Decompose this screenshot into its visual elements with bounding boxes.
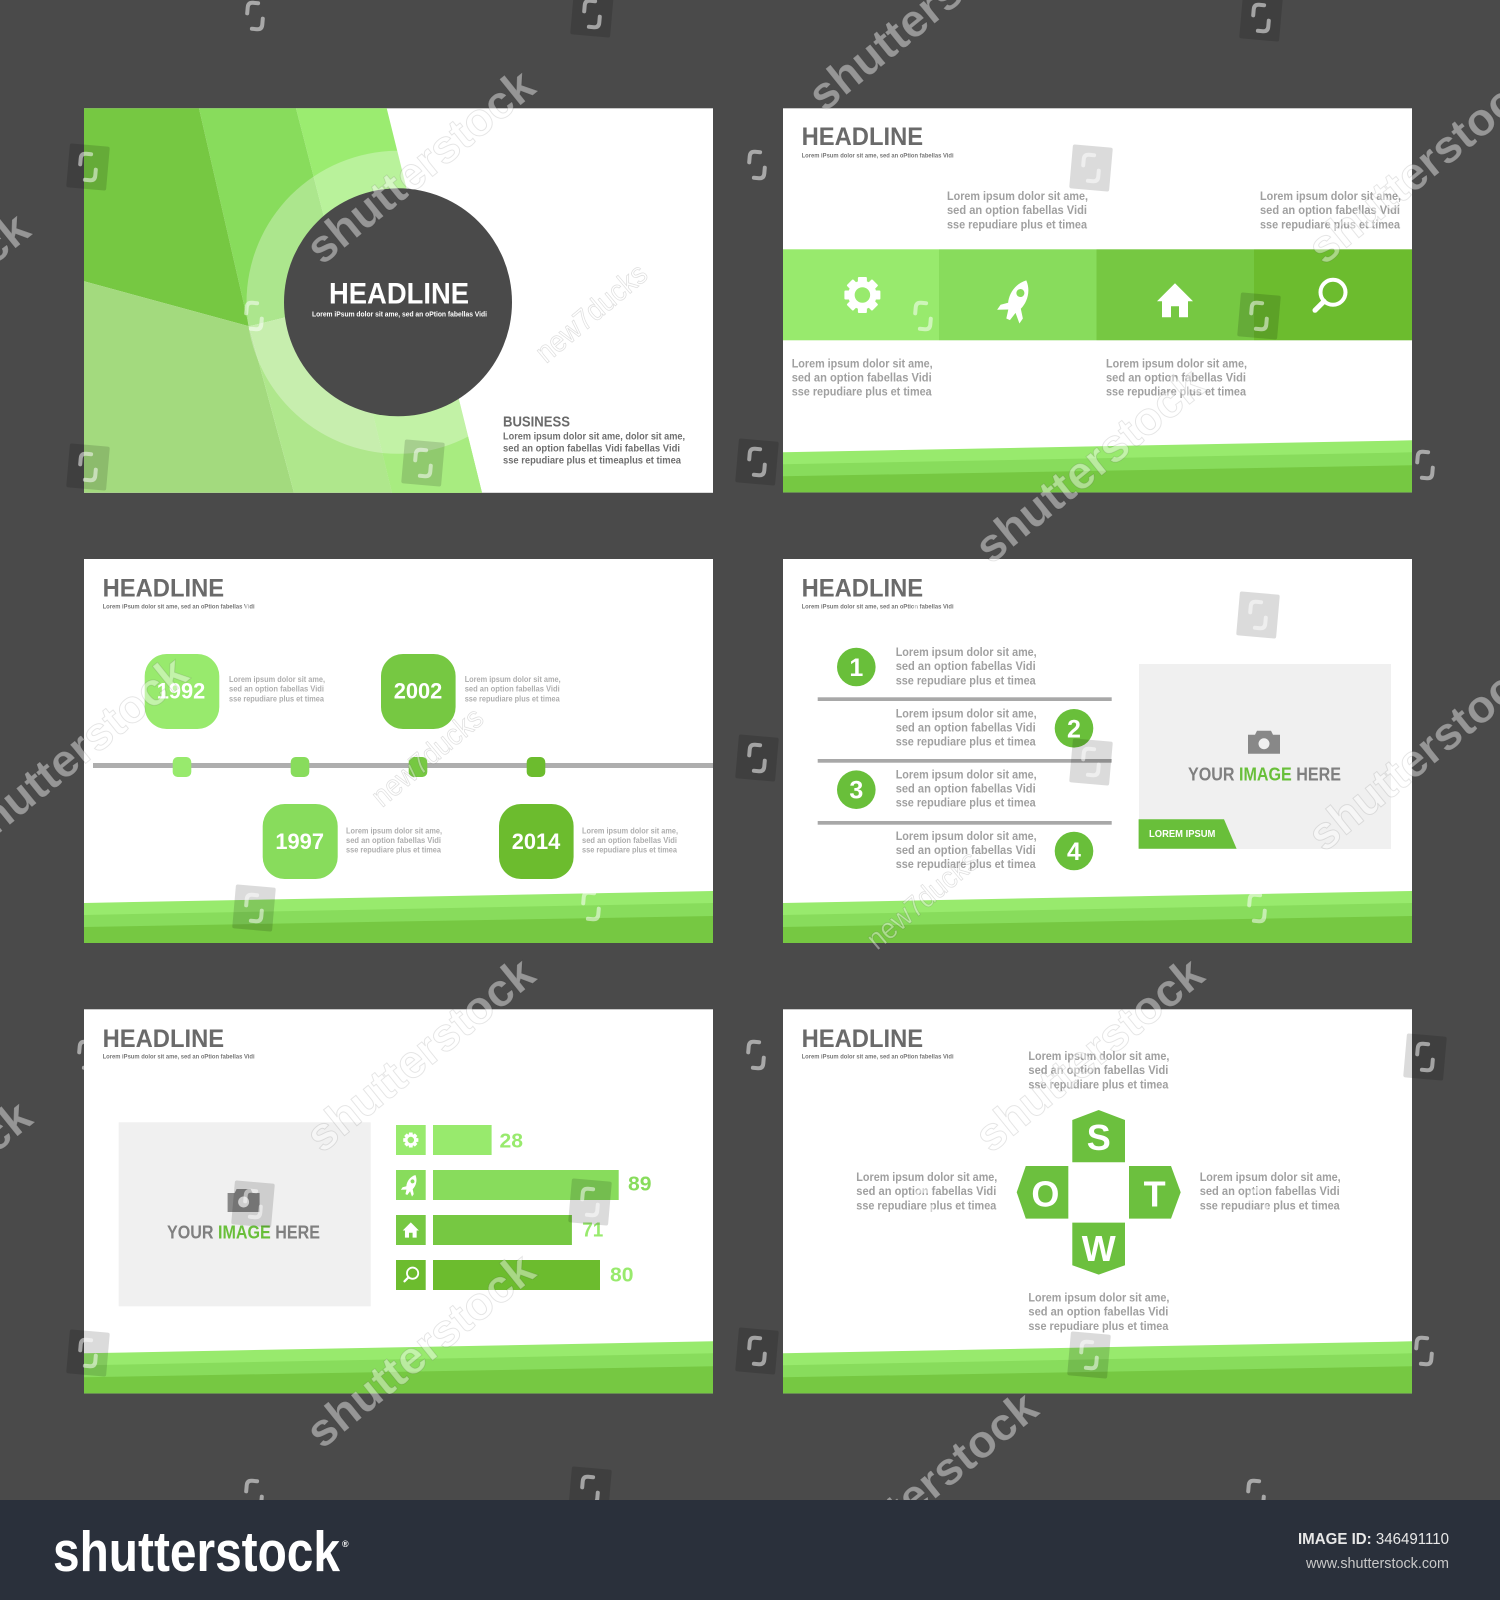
milestone 1997 bbox=[263, 804, 338, 879]
list item 1: sse repudiare plus et timea bbox=[896, 675, 1036, 687]
business text block: sse repudiare plus et timeaplus et timea bbox=[503, 454, 681, 466]
bar: rocket 89 bbox=[396, 1170, 652, 1200]
bar: gear 28: 28 bbox=[500, 1131, 523, 1153]
text block: bottom two bbox=[1106, 358, 1247, 398]
stock watermarks: shutterstock bbox=[965, 357, 1214, 573]
milestone 1997 text: sse repudiare plus et timea bbox=[346, 846, 442, 855]
list dividers bbox=[818, 697, 1112, 825]
text block: left: Lorem ipsum dolor sit ame, bbox=[856, 1172, 997, 1184]
text block: bottom two: sed an option fabellas Vidi bbox=[1106, 372, 1246, 384]
list item 1: 1 bbox=[849, 654, 863, 682]
icon: gear bbox=[844, 277, 880, 313]
business text block bbox=[503, 414, 685, 466]
list item 1: sed an option fabellas Vidi bbox=[896, 661, 1036, 673]
text block: bottom two: sse repudiare plus et timea bbox=[1106, 386, 1247, 398]
text block: top one bbox=[947, 191, 1088, 231]
image placeholder bbox=[1139, 664, 1391, 849]
heading: HEADLINE bbox=[103, 575, 224, 603]
milestone 1992 bbox=[145, 654, 219, 729]
text block: right: sse repudiare plus et timea bbox=[1200, 1200, 1340, 1212]
heading: HEADLINE bbox=[802, 575, 923, 603]
icon: home bbox=[1157, 283, 1193, 317]
tag: lorem ipsum bbox=[1139, 819, 1237, 849]
text block: top bbox=[1028, 1051, 1169, 1091]
milestone 2014 text: sed an option fabellas Vidi bbox=[582, 836, 677, 845]
stock watermarks: new7ducks bbox=[365, 701, 490, 813]
list item 2 bbox=[896, 708, 1093, 749]
heading: HEADLINE bbox=[802, 1025, 923, 1053]
list item 3 bbox=[837, 770, 1037, 810]
list item 2: 2 bbox=[1067, 715, 1081, 743]
placeholder caption: YOUR IMAGE HERE bbox=[167, 1223, 320, 1243]
milestone 2014 text: sse repudiare plus et timea bbox=[582, 846, 678, 855]
list item 4: sed an option fabellas Vidi bbox=[896, 845, 1036, 857]
text block: bottom one bbox=[792, 358, 933, 398]
stock watermarks: shutterstock bbox=[296, 1242, 545, 1458]
text block: top one: sed an option fabellas Vidi bbox=[947, 205, 1087, 217]
footer logo: shutterstock bbox=[53, 1520, 340, 1584]
heading bbox=[802, 575, 954, 610]
panel: SWOT slide bbox=[783, 1009, 1412, 1393]
SWOT O hexagon: O bbox=[1031, 1174, 1059, 1215]
text block: right: Lorem ipsum dolor sit ame, bbox=[1200, 1172, 1341, 1184]
text block: bottom: sed an option fabellas Vidi bbox=[1028, 1307, 1168, 1319]
text block: top two: sse repudiare plus et timea bbox=[1260, 219, 1401, 231]
list item 4: 4 bbox=[1067, 838, 1081, 866]
website url: www.shutterstock.com bbox=[1305, 1555, 1449, 1572]
milestone 2014 bbox=[499, 804, 574, 879]
panel: bar chart slide bbox=[84, 1009, 713, 1393]
milestone 1992 text bbox=[229, 675, 325, 704]
list item 2: sed an option fabellas Vidi bbox=[896, 722, 1036, 734]
milestone 1997 text: Lorem ipsum dolor sit ame, bbox=[346, 826, 442, 835]
image id: IMAGE ID: 346491110 bbox=[1298, 1531, 1449, 1548]
bar chart bbox=[396, 1125, 652, 1290]
green footer band bbox=[783, 440, 1412, 492]
milestone 2014 text: Lorem ipsum dolor sit ame, bbox=[582, 826, 678, 835]
green footer band bbox=[783, 891, 1412, 943]
milestone 1992 text: sse repudiare plus et timea bbox=[229, 695, 325, 704]
heading bbox=[103, 1025, 255, 1061]
stock watermarks: shutterstock bbox=[296, 946, 545, 1162]
dark headline circle bbox=[284, 188, 512, 416]
colour strip bbox=[783, 249, 1412, 340]
timeline axis and markers bbox=[93, 757, 713, 777]
milestone 1992: 1992 bbox=[157, 678, 205, 703]
text block: bottom: Lorem ipsum dolor sit ame, bbox=[1028, 1293, 1169, 1305]
milestone 2002 text bbox=[465, 675, 561, 704]
bar: search 80: 80 bbox=[610, 1265, 634, 1287]
stock watermarks: shutterstock bbox=[296, 58, 545, 274]
panel: cover slide bbox=[84, 108, 713, 493]
SWOT T hexagon bbox=[1129, 1166, 1181, 1219]
list item 4: sse repudiare plus et timea bbox=[896, 859, 1036, 871]
business text block: Lorem ipsum dolor sit ame, dolor sit ame, bbox=[503, 430, 685, 442]
business text block: BUSINESS bbox=[503, 414, 570, 430]
translucent ring bbox=[246, 150, 468, 454]
placeholder caption: YOUR IMAGE HERE bbox=[1188, 765, 1341, 785]
heading bbox=[802, 1025, 954, 1061]
list item 2: Lorem ipsum dolor sit ame, bbox=[896, 708, 1037, 720]
heading bbox=[802, 123, 954, 159]
milestone 2002 text: sse repudiare plus et timea bbox=[465, 695, 560, 704]
text block: left: sse repudiare plus et timea bbox=[856, 1200, 997, 1212]
heading: Lorem iPsum dolor sit ame, sed an oPtion fabellas Vidi bbox=[802, 153, 954, 159]
text block: bottom one: Lorem ipsum dolor sit ame, bbox=[792, 358, 933, 370]
milestone 2002: 2002 bbox=[394, 678, 442, 703]
list item 1: Lorem ipsum dolor sit ame, bbox=[896, 647, 1037, 659]
SWOT W hexagon bbox=[1072, 1223, 1125, 1275]
milestone 2014 text bbox=[582, 826, 678, 855]
stock watermarks: shutterstock bbox=[799, 1380, 1048, 1596]
stock watermarks: new7ducks bbox=[860, 844, 985, 956]
list item 3: Lorem ipsum dolor sit ame, bbox=[896, 770, 1037, 782]
milestone 1992 text: sed an option fabellas Vidi bbox=[229, 685, 324, 694]
panel: numbered list slide bbox=[783, 559, 1412, 943]
heading: Lorem iPsum dolor sit ame, sed an oPtion fabellas Vidi bbox=[802, 1055, 954, 1061]
list item 4 bbox=[896, 831, 1093, 871]
text block: bottom: sse repudiare plus et timea bbox=[1028, 1321, 1169, 1333]
milestone 2014: 2014 bbox=[512, 829, 561, 854]
stock watermarks: new7ducks bbox=[529, 257, 654, 369]
list item 3: 3 bbox=[849, 777, 863, 805]
list item 3: sed an option fabellas Vidi bbox=[896, 784, 1036, 796]
text block: bottom bbox=[1028, 1293, 1169, 1333]
stock watermarks: shutterstock bbox=[965, 946, 1214, 1162]
text block: bottom one: sse repudiare plus et timea bbox=[792, 386, 932, 398]
heading bbox=[103, 575, 255, 610]
text block: bottom two: Lorem ipsum dolor sit ame, bbox=[1106, 358, 1247, 370]
green footer band bbox=[783, 1341, 1412, 1393]
heading: Lorem iPsum dolor sit ame, sed an oPtion fabellas Vidi bbox=[103, 604, 255, 610]
bar: home 71 bbox=[396, 1215, 603, 1245]
business text block: sed an option fabellas Vidi fabellas Vidi bbox=[503, 442, 680, 454]
text block: top two: sed an option fabellas Vidi bbox=[1260, 205, 1400, 217]
list item 1 bbox=[837, 647, 1037, 687]
green footer band bbox=[84, 1341, 713, 1393]
image placeholder bbox=[119, 1122, 371, 1306]
SWOT W hexagon: W bbox=[1082, 1228, 1116, 1269]
icon: camera bbox=[228, 1189, 260, 1212]
icon: rocket bbox=[995, 274, 1038, 325]
bar: rocket 89: 89 bbox=[628, 1174, 652, 1196]
milestone 1992 text: Lorem ipsum dolor sit ame, bbox=[229, 675, 325, 684]
text block: top one: Lorem ipsum dolor sit ame, bbox=[947, 191, 1088, 203]
bar: gear 28 bbox=[396, 1125, 523, 1155]
heading: Lorem iPsum dolor sit ame, sed an oPtion fabellas Vidi bbox=[802, 604, 954, 610]
list item 4: Lorem ipsum dolor sit ame, bbox=[896, 831, 1037, 843]
text block: right bbox=[1200, 1172, 1341, 1212]
SWOT O hexagon bbox=[1017, 1166, 1068, 1219]
text block: bottom one: sed an option fabellas Vidi bbox=[792, 372, 932, 384]
panel: timeline slide bbox=[84, 559, 713, 943]
list item 2: sse repudiare plus et timea bbox=[896, 737, 1036, 749]
text block: left: sed an option fabellas Vidi bbox=[856, 1186, 996, 1198]
SWOT S hexagon: S bbox=[1087, 1117, 1111, 1158]
milestone 2002 text: Lorem ipsum dolor sit ame, bbox=[465, 675, 561, 684]
text block: top: sse repudiare plus et timea bbox=[1028, 1079, 1169, 1091]
milestone 1997: 1997 bbox=[275, 829, 324, 854]
text block: right: sed an option fabellas Vidi bbox=[1200, 1186, 1340, 1198]
panel: four icon strip slide bbox=[783, 108, 1412, 492]
milestone 2002 bbox=[381, 654, 456, 729]
milestone 2002 text: sed an option fabellas Vidi bbox=[465, 685, 560, 694]
bar: home 71: 71 bbox=[582, 1220, 603, 1242]
dark headline circle: HEADLINE bbox=[329, 277, 469, 310]
heading: HEADLINE bbox=[802, 123, 923, 151]
text block: left bbox=[856, 1172, 997, 1212]
heading: HEADLINE bbox=[103, 1025, 224, 1053]
green footer band bbox=[84, 891, 713, 943]
milestone 1997 text: sed an option fabellas Vidi bbox=[346, 836, 441, 845]
icon: search bbox=[1315, 280, 1346, 310]
icon: camera bbox=[1248, 731, 1280, 754]
footer bar bbox=[0, 1500, 1500, 1600]
SWOT T hexagon: T bbox=[1144, 1174, 1166, 1215]
radiating green wedges bbox=[84, 108, 482, 493]
text block: top two: Lorem ipsum dolor sit ame, bbox=[1260, 191, 1401, 203]
tag: lorem ipsum: LOREM IPSUM bbox=[1149, 829, 1215, 840]
milestone 1997 text bbox=[346, 826, 442, 855]
footer logo: ® bbox=[342, 1539, 349, 1549]
SWOT S hexagon bbox=[1072, 1110, 1125, 1162]
text block: top: Lorem ipsum dolor sit ame, bbox=[1028, 1051, 1169, 1063]
dark headline circle: Lorem iPsum dolor sit ame, sed an oPtion fabellas Vidi bbox=[312, 311, 487, 318]
text block: top: sed an option fabellas Vidi bbox=[1028, 1065, 1168, 1077]
text block: top one: sse repudiare plus et timea bbox=[947, 219, 1088, 231]
heading: Lorem iPsum dolor sit ame, sed an oPtion fabellas Vidi bbox=[103, 1055, 255, 1061]
list item 3: sse repudiare plus et timea bbox=[896, 798, 1036, 810]
bar: search 80 bbox=[396, 1260, 634, 1290]
text block: top two bbox=[1260, 191, 1401, 231]
